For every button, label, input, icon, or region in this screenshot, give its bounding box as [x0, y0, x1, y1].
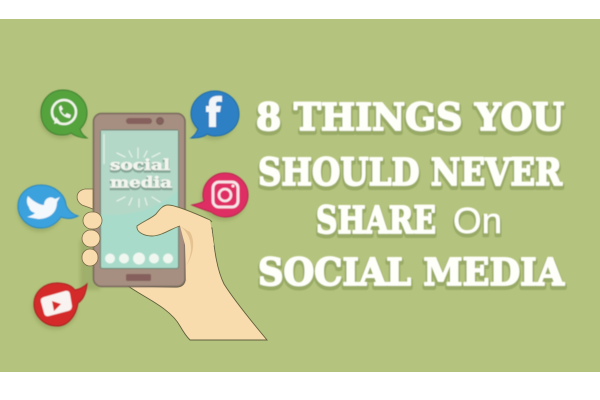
drop shadows behind phone and icons [17, 93, 247, 330]
screen sunburst rays [117, 148, 160, 207]
title line 3 shadow: SHARE [316, 200, 436, 244]
title line 1: 8 THINGS YOU [256, 95, 564, 139]
thumb outline [137, 205, 212, 236]
hand front: thumb and fingers [77, 189, 214, 280]
title word On shadow: On [453, 202, 502, 244]
phone speaker [126, 118, 152, 124]
hand back: palm and wrist [128, 228, 267, 340]
icon: youtube bubble [34, 283, 87, 326]
screen upper area [101, 130, 178, 215]
screen heading: social [110, 156, 170, 174]
title line 2 shadow: SHOULD NEVER [258, 152, 562, 196]
title line 3: SHARE [316, 198, 436, 242]
icon: instagram bubble [192, 173, 248, 217]
thumb [137, 205, 214, 280]
phone home button [126, 274, 151, 281]
phone camera [156, 118, 164, 124]
screen heading [110, 156, 172, 194]
fingers [77, 189, 102, 266]
phone [94, 114, 185, 286]
phone screen [100, 130, 178, 268]
title line 2: SHOULD NEVER [258, 150, 562, 194]
icon: twitter bubble [18, 185, 78, 228]
title line 4 shadow: SOCIAL MEDIA [258, 252, 565, 296]
thumb crease shade [180, 226, 193, 266]
screen dots [105, 252, 173, 264]
screen heading: media [110, 174, 172, 192]
title word On: On [453, 200, 502, 241]
title line 4: SOCIAL MEDIA [258, 250, 565, 294]
title [256, 95, 565, 296]
screen heading: media [110, 176, 172, 194]
icon: facebook bubble [191, 91, 239, 138]
phone body [94, 114, 185, 286]
screen heading: social [110, 158, 170, 176]
screen highlight [103, 134, 105, 164]
icon: whatsapp bubble [41, 90, 87, 138]
title line 1 shadow: 8 THINGS YOU [256, 98, 564, 142]
